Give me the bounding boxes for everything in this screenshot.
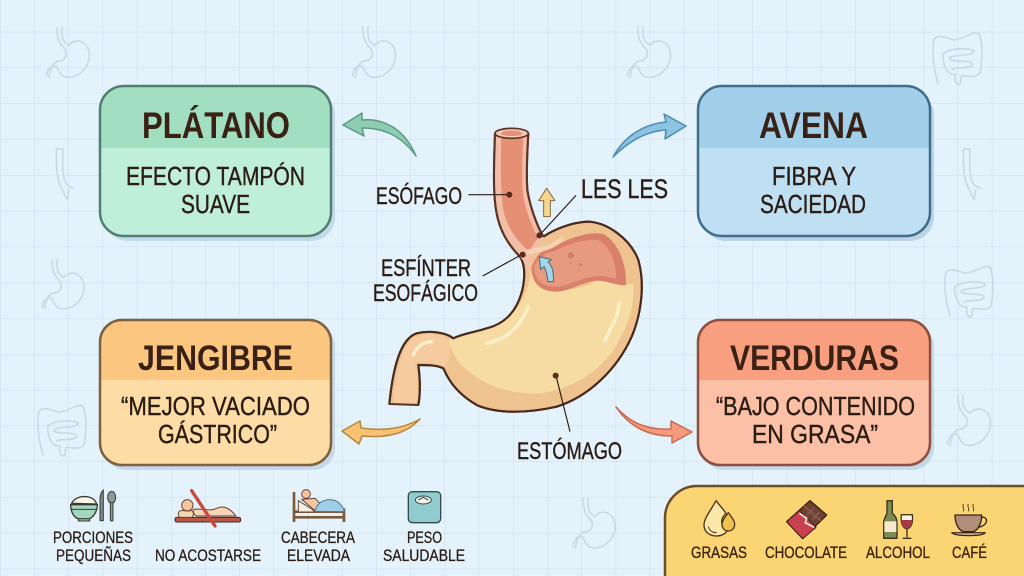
label: porciones pequeñas (53, 529, 133, 565)
heading: verduras: VERDURAS (730, 339, 899, 378)
acid pocket (532, 233, 626, 292)
panel: foods to avoid (665, 486, 1024, 576)
label: estómago: ESTÓMAGO (517, 438, 622, 465)
duodenum (393, 334, 450, 403)
text: bajo contenido en grasa: “BAJO CONTENIDO (716, 391, 915, 421)
icon: no lying down (175, 491, 241, 526)
panel: jengibre (100, 320, 335, 470)
label: esfínter esofágico: ESOFÁGICO (373, 280, 478, 307)
icon: scale (408, 492, 441, 523)
lifestyle row (53, 490, 465, 565)
label: no acostarse: NO ACOSTARSE (155, 547, 261, 565)
icon: oil drops (704, 501, 735, 536)
text: fibra y saciedad: SACIEDAD (760, 189, 866, 219)
label: esfínter esofágico (373, 255, 478, 307)
icon: wine bottle and glass (884, 501, 913, 538)
icon: coffee cup (952, 504, 987, 536)
arrow: to plátano (343, 113, 416, 156)
text: bajo contenido en grasa: EN GRASA” (752, 419, 878, 449)
icon: bowl and cutlery (71, 490, 116, 521)
label: peso saludable (383, 529, 465, 565)
arrow: to verduras (616, 407, 692, 443)
label: peso saludable: SALUDABLE (383, 547, 465, 565)
label: peso saludable: PESO (407, 529, 442, 547)
text: bajo contenido en grasa (716, 391, 915, 449)
text: mejor vaciado gástrico: GÁSTRICO” (158, 419, 277, 449)
arrow: to avena (613, 114, 686, 157)
leader dots (506, 192, 559, 379)
icon: raised bed (294, 490, 344, 522)
text: mejor vaciado gástrico (121, 391, 310, 449)
panel: avena (698, 86, 934, 241)
panel: plátano (100, 86, 335, 241)
text: mejor vaciado gástrico: “MEJOR VACIADO (121, 391, 310, 421)
label: les les: LES LES (581, 174, 668, 204)
panel: verduras (698, 320, 934, 470)
heading: jengibre: JENGIBRE (138, 339, 293, 378)
label: porciones pequeñas: PORCIONES (53, 529, 133, 547)
label: cabecera elevada (281, 529, 355, 565)
arrow: to jengibre (342, 419, 420, 444)
esophagus (494, 133, 544, 273)
highlights (413, 303, 619, 355)
label: grasas: GRASAS (691, 544, 747, 562)
text: efecto tampón suave (126, 161, 305, 219)
arrow: up yellow (539, 188, 555, 217)
leader lines (468, 195, 576, 432)
text: fibra y saciedad: FIBRA Y (772, 161, 856, 191)
stomach lower fill (448, 273, 634, 394)
label: esfínter esofágico: ESFÍNTER (381, 255, 471, 282)
arrow: reflux up (539, 257, 553, 282)
icon: stomach body (389, 133, 642, 412)
stomach outline (389, 222, 642, 412)
label: chocolate: CHOCOLATE (765, 544, 847, 562)
sphincter band (528, 239, 562, 252)
label: cabecera elevada: CABECERA (281, 529, 355, 547)
text: efecto tampón suave: SUAVE (181, 189, 250, 219)
stomach illustration (389, 128, 642, 432)
label: alcohol: ALCOHOL (866, 544, 930, 562)
text: fibra y saciedad (760, 161, 866, 219)
label: café: CAFÉ (952, 543, 987, 562)
label: porciones pequeñas: PEQUEÑAS (56, 545, 131, 565)
label: esófago: ESÓFAGO (376, 183, 462, 210)
text: efecto tampón suave: EFECTO TAMPÓN (126, 161, 305, 191)
label: cabecera elevada: ELEVADA (287, 547, 350, 565)
heading: avena: AVENA (759, 105, 868, 146)
icon: chocolate bar (787, 501, 827, 539)
heading: plátano: PLÁTANO (142, 105, 290, 146)
